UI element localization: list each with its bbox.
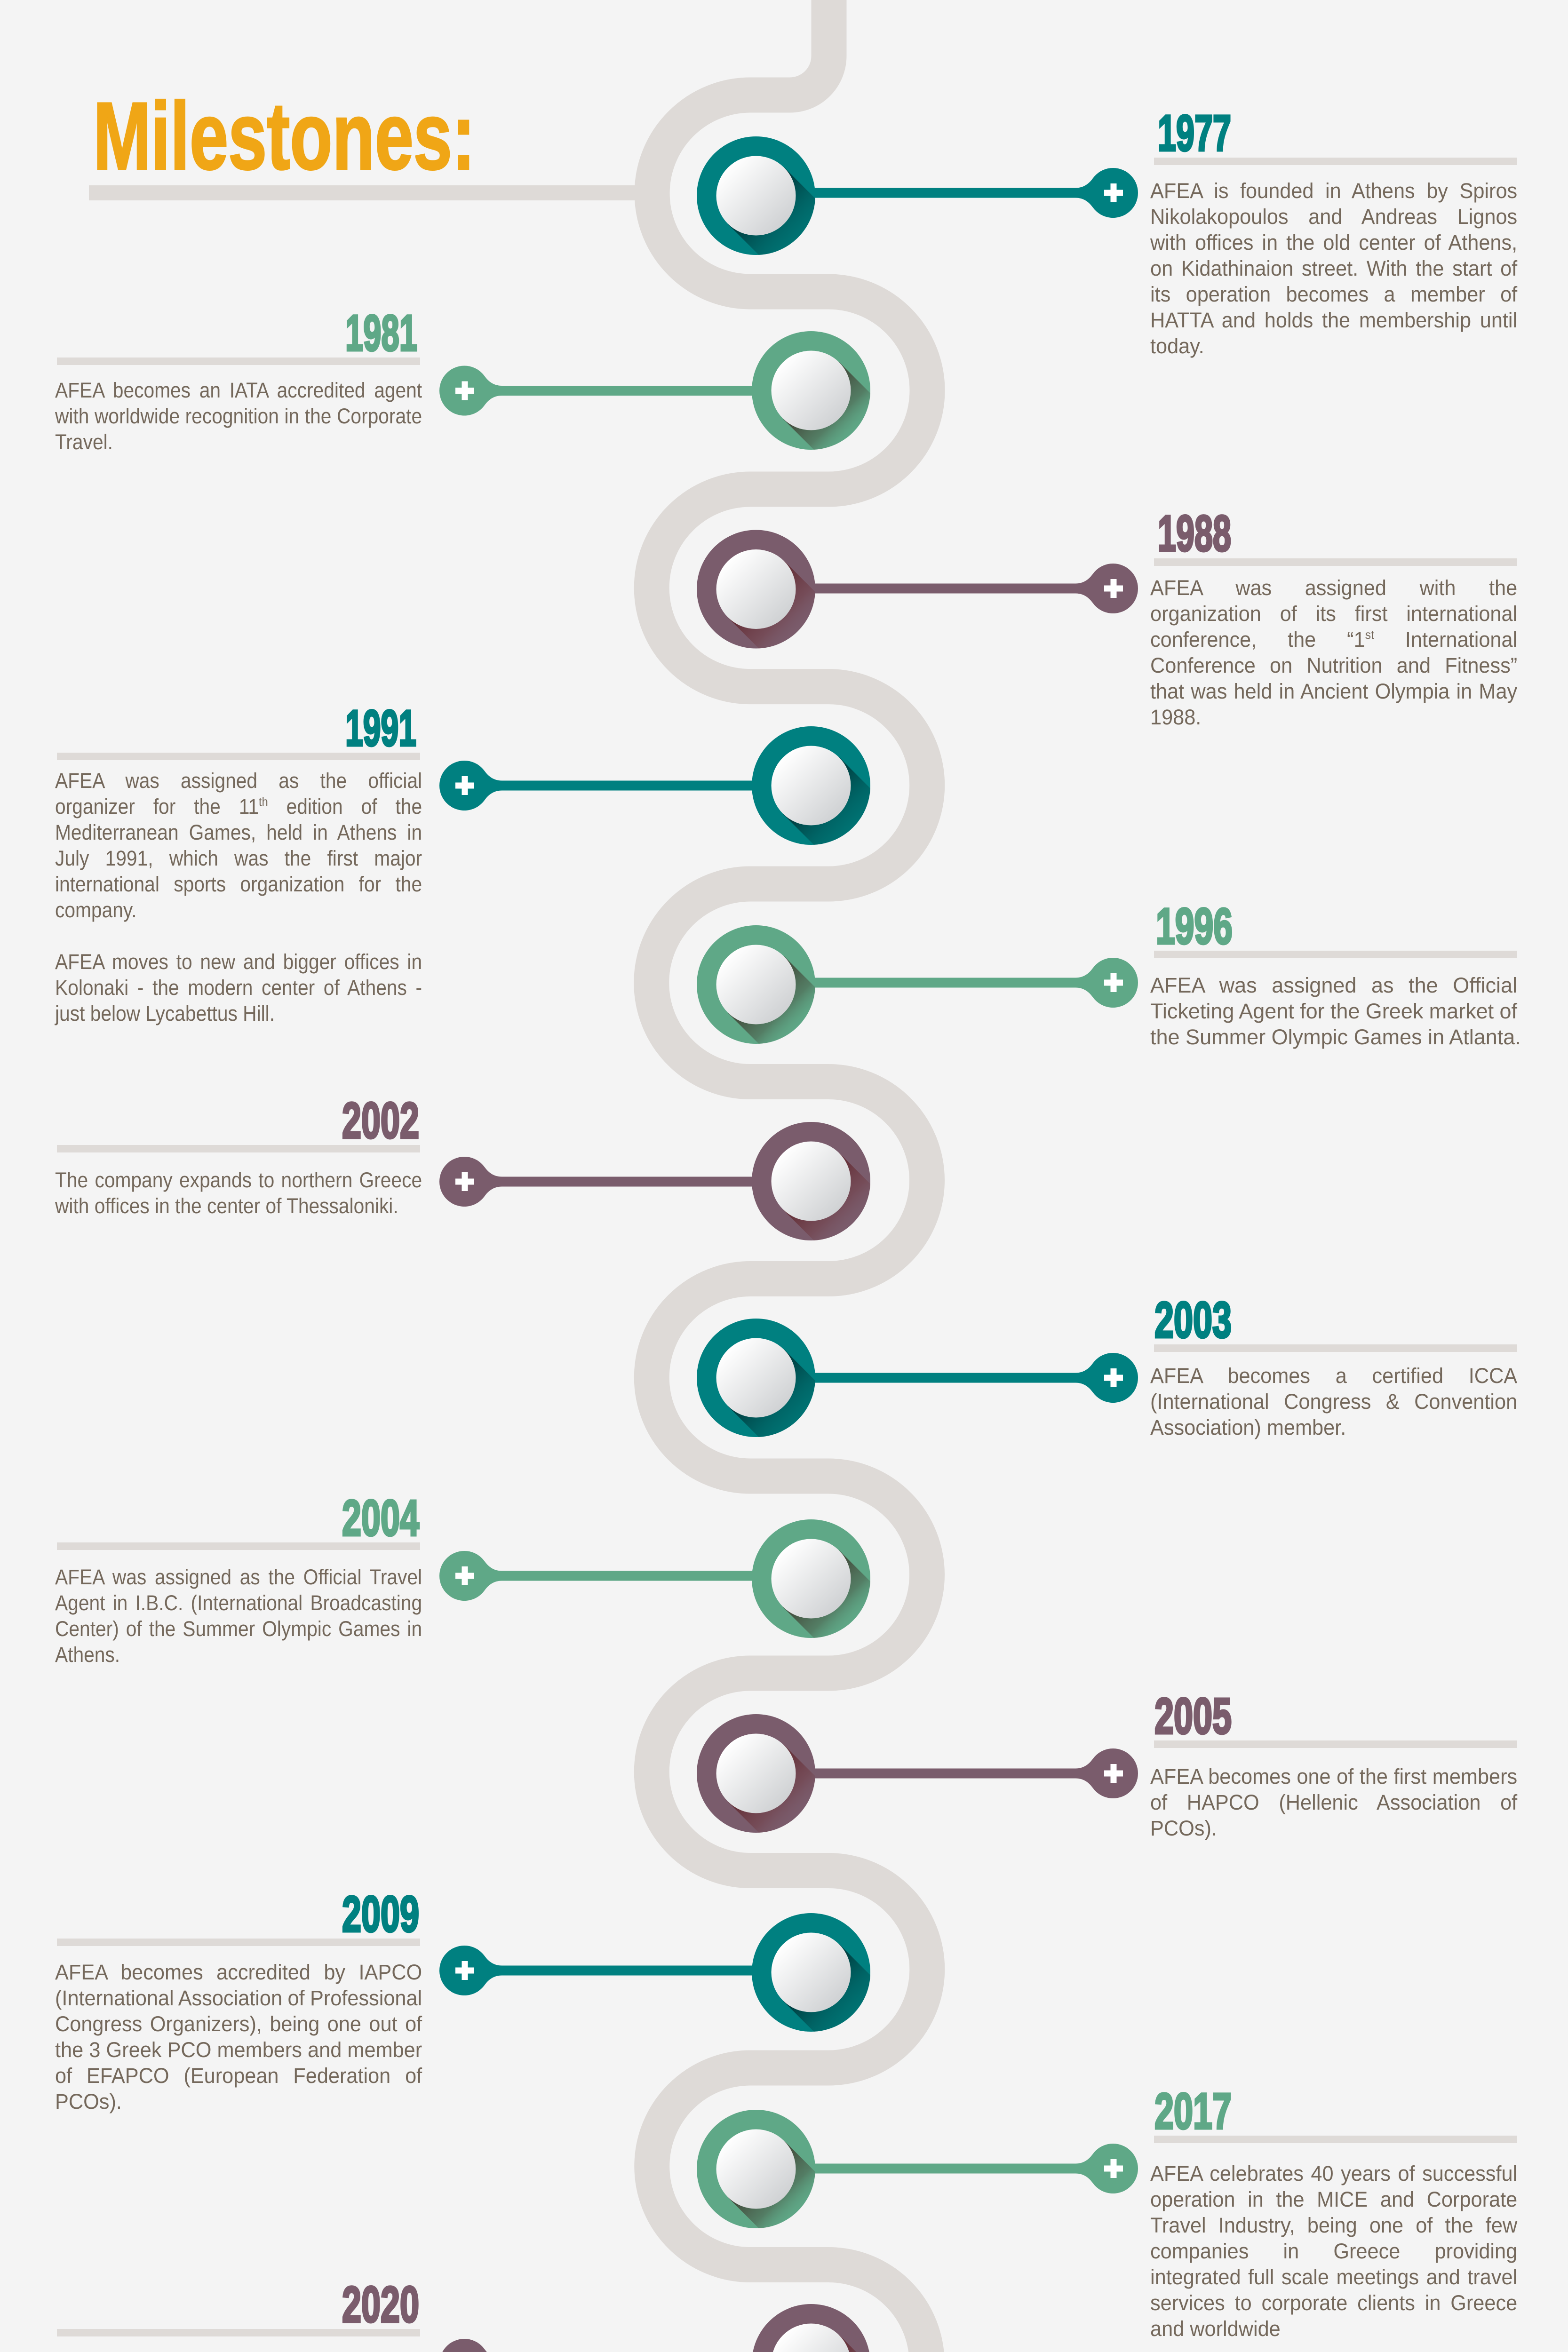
text block 2017: AFEA celebrates 40 years of successful — [1150, 2161, 1517, 2185]
text block 2002: The company expands to northern Greece — [55, 1168, 422, 1192]
text block 2004: Athens. — [55, 1643, 120, 1667]
year heading 1988: 1988 — [1158, 505, 1231, 562]
year heading 1991 — [57, 699, 420, 760]
text block 1996 — [1150, 972, 1517, 1050]
text block 1977: today. — [1150, 334, 1204, 358]
text block 1996: Ticketing Agent for the Greek market of — [1150, 999, 1517, 1023]
year heading 2017: 2017 — [1154, 2082, 1232, 2139]
year heading 1991: 1991 — [345, 699, 416, 756]
text block 1988: 1988. — [1150, 705, 1201, 729]
text block 2005: AFEA becomes one of the first members — [1150, 1764, 1517, 1788]
text block 1977: on Kidathinaion street. With the start of — [1150, 256, 1517, 280]
year heading 2020: 2020 — [342, 2276, 419, 2333]
text block 2005 — [1150, 1764, 1517, 1841]
text block 1977: its operation becomes a member of — [1150, 282, 1517, 306]
text block 2003: Association) member. — [1150, 1415, 1346, 1439]
text block 2004: Agent in I.B.C. (International Broadcasting — [55, 1591, 422, 1615]
year heading 2020 — [57, 2276, 420, 2336]
text block 1981: with worldwide recognition in the Corporate — [55, 404, 422, 428]
year heading 2009: 2009 — [342, 1885, 419, 1942]
text block 2009: of EFAPCO (European Federation of — [55, 2064, 422, 2088]
text block 2004: Center) of the Summer Olympic Games in — [55, 1617, 422, 1641]
text block 2009: the 3 Greek PCO members and member — [55, 2038, 422, 2062]
milestone connector 1991 — [439, 726, 870, 845]
year heading 1981: 1981 — [345, 304, 417, 361]
milestone connector 2004 — [439, 1519, 870, 1638]
text block 1991: July 1991, which was the first major — [55, 846, 422, 870]
text block 1991: just below Lycabettus Hill. — [55, 1001, 275, 1025]
year heading 1981 — [57, 304, 420, 365]
milestone connector 1981 — [439, 331, 870, 450]
text block 2017: companies in Greece providing — [1150, 2239, 1517, 2263]
text block 2003 — [1150, 1363, 1517, 1440]
text block 1977: AFEA is founded in Athens by Spiros — [1150, 179, 1517, 203]
text block 2002: with offices in the center of Thessaloniki. — [55, 1194, 398, 1218]
text block 1991: AFEA was assigned as the official — [55, 769, 422, 792]
text block 1991: Mediterranean Games, held in Athens in — [55, 820, 422, 844]
text block 2002 — [55, 1167, 422, 1219]
milestone connector 1988 — [697, 530, 1138, 648]
text block 2009: AFEA becomes accredited by IAPCO — [55, 1960, 422, 1984]
text block 2009 — [55, 1959, 422, 2114]
text block 2003: AFEA becomes a certified ICCA — [1150, 1364, 1517, 1388]
text block 2017 — [1150, 2161, 1517, 2342]
title: Milestones: Milestones: — [93, 83, 475, 190]
text block 1991 — [55, 768, 422, 1026]
text block 2017: Travel Industry, being one of the few — [1150, 2213, 1517, 2237]
year heading 2003 — [1154, 1291, 1517, 1352]
text block 1991: international sports organization for the — [55, 872, 422, 896]
year heading 2002 — [57, 1092, 420, 1152]
milestone connector 2017 — [697, 2110, 1138, 2228]
text block 2017: services to corporate clients in Greece — [1150, 2291, 1517, 2315]
year heading 2017 — [1154, 2082, 1517, 2143]
year heading 2009 — [57, 1885, 420, 1946]
text block 2005: PCOs). — [1150, 1816, 1217, 1840]
text block 1991: company. — [55, 898, 137, 922]
milestone connector 1977 — [697, 136, 1138, 255]
text block 1991: AFEA moves to new and bigger offices in — [55, 949, 422, 974]
milestone connector 2020 — [439, 2304, 870, 2352]
text block 1991: Kolonaki - the modern center of Athens - — [55, 976, 422, 999]
year heading 1996 — [1154, 898, 1517, 958]
milestone connector 2005 — [697, 1714, 1138, 1833]
text block 1988: organization of its first international — [1150, 602, 1517, 626]
text block 2017: integrated full scale meetings and travel — [1150, 2265, 1517, 2289]
text block 1988 — [1150, 575, 1517, 730]
text block 2004 — [55, 1564, 422, 1668]
text block 1981: AFEA becomes an IATA accredited agent — [55, 378, 422, 402]
text block 1988: that was held in Ancient Olympia in May — [1150, 679, 1517, 703]
text block 2009: Congress Organizers), being one out of — [55, 2012, 422, 2036]
text block 2009: PCOs). — [55, 2090, 122, 2114]
year heading 2002: 2002 — [342, 1092, 419, 1149]
text block 2005: of HAPCO (Hellenic Association of — [1150, 1790, 1517, 1814]
text block 2004: AFEA was assigned as the Official Travel — [55, 1565, 422, 1589]
year heading 2004 — [57, 1489, 420, 1550]
text block 1988: AFEA was assigned with the — [1150, 576, 1517, 600]
milestone connector 2003 — [697, 1319, 1138, 1437]
year heading 1988 — [1154, 505, 1517, 566]
year heading 1996: 1996 — [1156, 898, 1233, 954]
text block 1991: organizer for the 11th edition of the — [55, 794, 422, 818]
text block 1977: with offices in the old center of Athens, — [1150, 230, 1517, 254]
year heading 2005: 2005 — [1154, 1687, 1232, 1744]
milestone connector 2002 — [439, 1122, 870, 1240]
text block 2009: (International Association of Professional — [55, 1986, 422, 2010]
text block 1988: conference, the “1st International — [1150, 628, 1517, 652]
winding timeline path — [652, 0, 927, 2352]
text block 1981 — [55, 377, 422, 455]
milestone connector 2009 — [439, 1913, 870, 2032]
year heading 2004: 2004 — [342, 1489, 419, 1546]
year heading 2005 — [1154, 1687, 1517, 1748]
text block 1996: AFEA was assigned as the Official — [1150, 973, 1517, 997]
year heading 1977: 1977 — [1158, 104, 1231, 161]
year heading 1977 — [1154, 104, 1517, 165]
year heading 2003: 2003 — [1154, 1291, 1232, 1348]
text block 2003: (International Congress & Convention — [1150, 1390, 1517, 1414]
text block 1977: HATTA and holds the membership until — [1150, 308, 1517, 332]
milestone connector 1996 — [697, 925, 1138, 1044]
text block 2017: operation in the MICE and Corporate — [1150, 2187, 1517, 2211]
text block 1988: Conference on Nutrition and Fitness” — [1150, 653, 1517, 677]
text block 1996: the Summer Olympic Games in Atlanta. — [1150, 1025, 1521, 1049]
text block 1981: Travel. — [55, 430, 113, 454]
text block 1977 — [1150, 178, 1517, 359]
text block 2017: and worldwide — [1150, 2317, 1281, 2341]
text block 1977: Nikolakopoulos and Andreas Lignos — [1150, 205, 1517, 229]
